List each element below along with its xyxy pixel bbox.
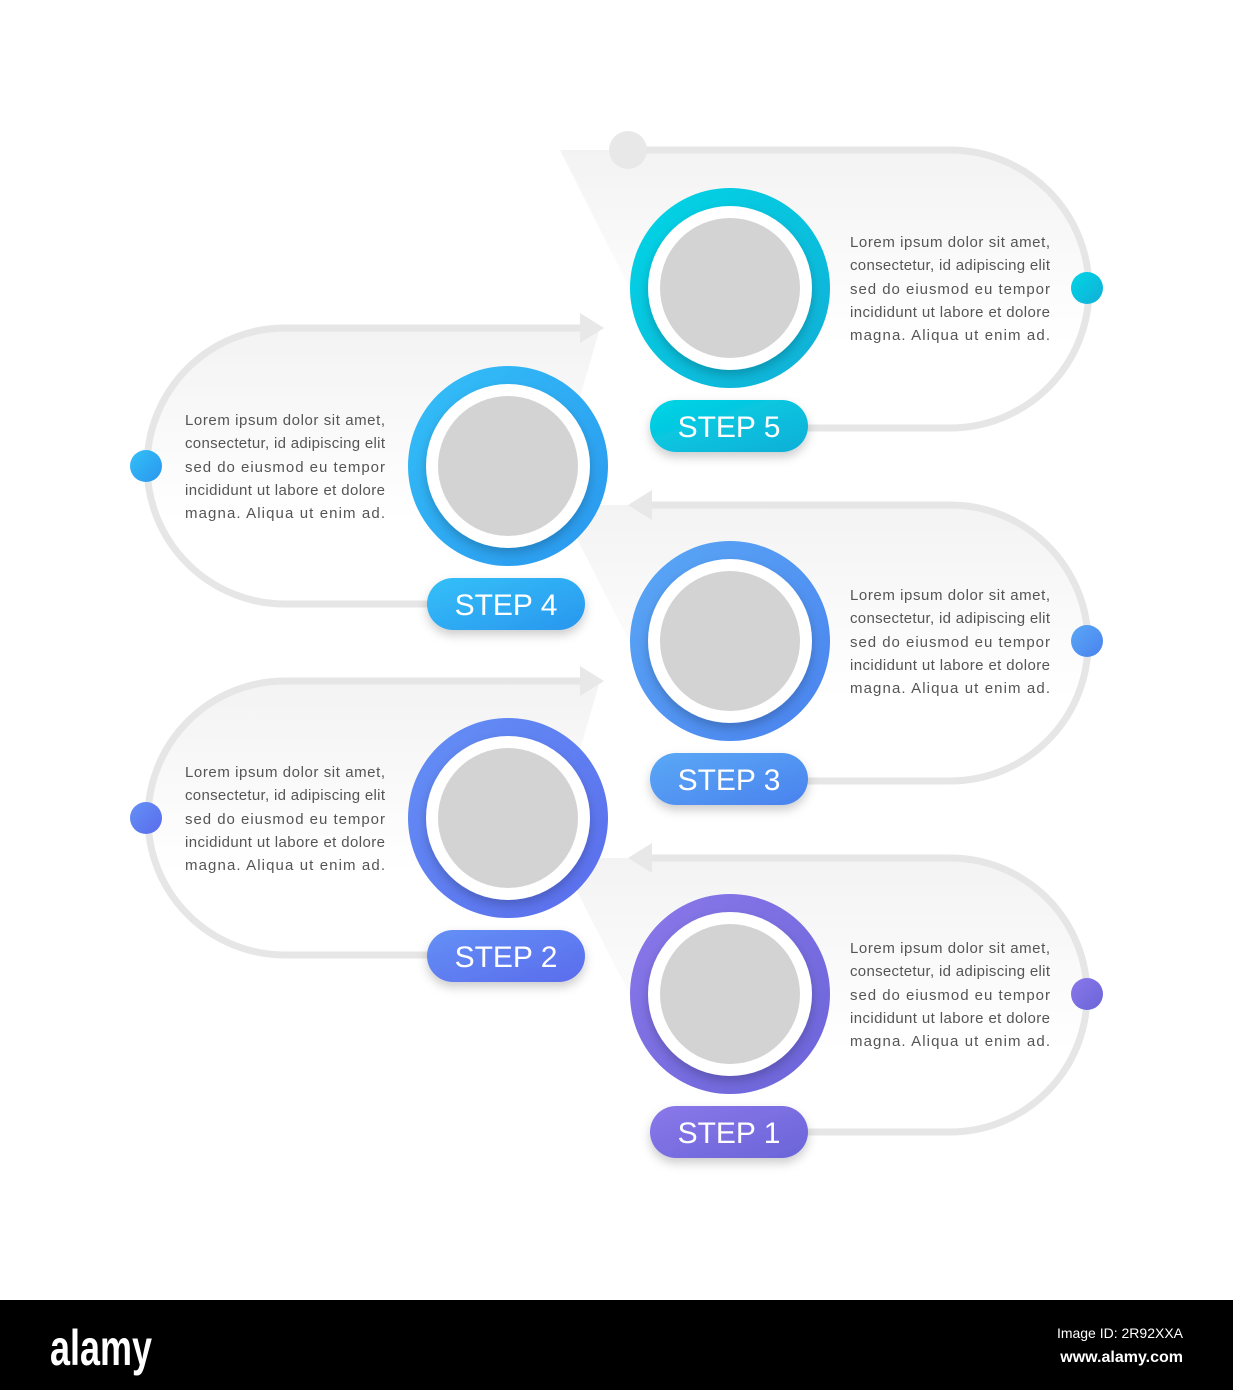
loop: step 4 xyxy=(147,313,604,604)
step 3: sed do eiusmod eu tempor xyxy=(850,634,1050,651)
step 2: consectetur, id adipiscing elit xyxy=(185,787,386,804)
step 3: Lorem ipsum dolor sit amet, xyxy=(850,587,1050,604)
step 2: Lorem ipsum dolor sit amet, xyxy=(185,764,385,781)
footer bar: alamy xyxy=(50,1320,152,1376)
loop: step 1 xyxy=(560,843,1087,1132)
step 4: Lorem ipsum dolor sit amet, xyxy=(185,412,385,429)
step 5: consectetur, id adipiscing elit xyxy=(850,257,1051,274)
footer bar: Image ID: 2R92XXA xyxy=(1057,1325,1184,1341)
step 3 xyxy=(630,541,1103,805)
step 5: STEP 5 xyxy=(678,411,780,444)
step 3: incididunt ut labore et dolore xyxy=(850,657,1050,674)
step 5: Lorem ipsum dolor sit amet, xyxy=(850,234,1050,251)
step 1: STEP 1 xyxy=(678,1117,780,1150)
step 1: incididunt ut labore et dolore xyxy=(850,1010,1050,1027)
footer bar xyxy=(0,1300,1233,1390)
step 4: STEP 4 xyxy=(455,589,557,622)
loop: step 2 xyxy=(148,666,604,955)
step 4: sed do eiusmod eu tempor xyxy=(185,459,385,476)
step 5: magna. Aliqua ut enim ad. xyxy=(850,327,1050,344)
footer bar: www.alamy.com xyxy=(1059,1349,1183,1366)
step 5 xyxy=(630,188,1103,452)
step 5: incididunt ut labore et dolore xyxy=(850,304,1050,321)
step 1 xyxy=(630,894,1103,1158)
step 4: incididunt ut labore et dolore xyxy=(185,482,385,499)
step 2 xyxy=(130,718,608,982)
step 2: magna. Aliqua ut enim ad. xyxy=(185,857,385,874)
step 1: magna. Aliqua ut enim ad. xyxy=(850,1033,1050,1050)
step 5: sed do eiusmod eu tempor xyxy=(850,281,1050,298)
step 2: STEP 2 xyxy=(455,941,557,974)
step 1: sed do eiusmod eu tempor xyxy=(850,987,1050,1004)
step 4: consectetur, id adipiscing elit xyxy=(185,435,386,452)
step 4 xyxy=(130,366,608,630)
step 1: consectetur, id adipiscing elit xyxy=(850,963,1051,980)
step 3: STEP 3 xyxy=(678,764,780,797)
step 2: sed do eiusmod eu tempor xyxy=(185,811,385,828)
step 4: magna. Aliqua ut enim ad. xyxy=(185,505,385,522)
loop: step 5 xyxy=(560,131,1089,428)
step 3: consectetur, id adipiscing elit xyxy=(850,610,1051,627)
step 1: Lorem ipsum dolor sit amet, xyxy=(850,940,1050,957)
loop: step 3 xyxy=(560,490,1088,781)
step 3: magna. Aliqua ut enim ad. xyxy=(850,680,1050,697)
step 2: incididunt ut labore et dolore xyxy=(185,834,385,851)
